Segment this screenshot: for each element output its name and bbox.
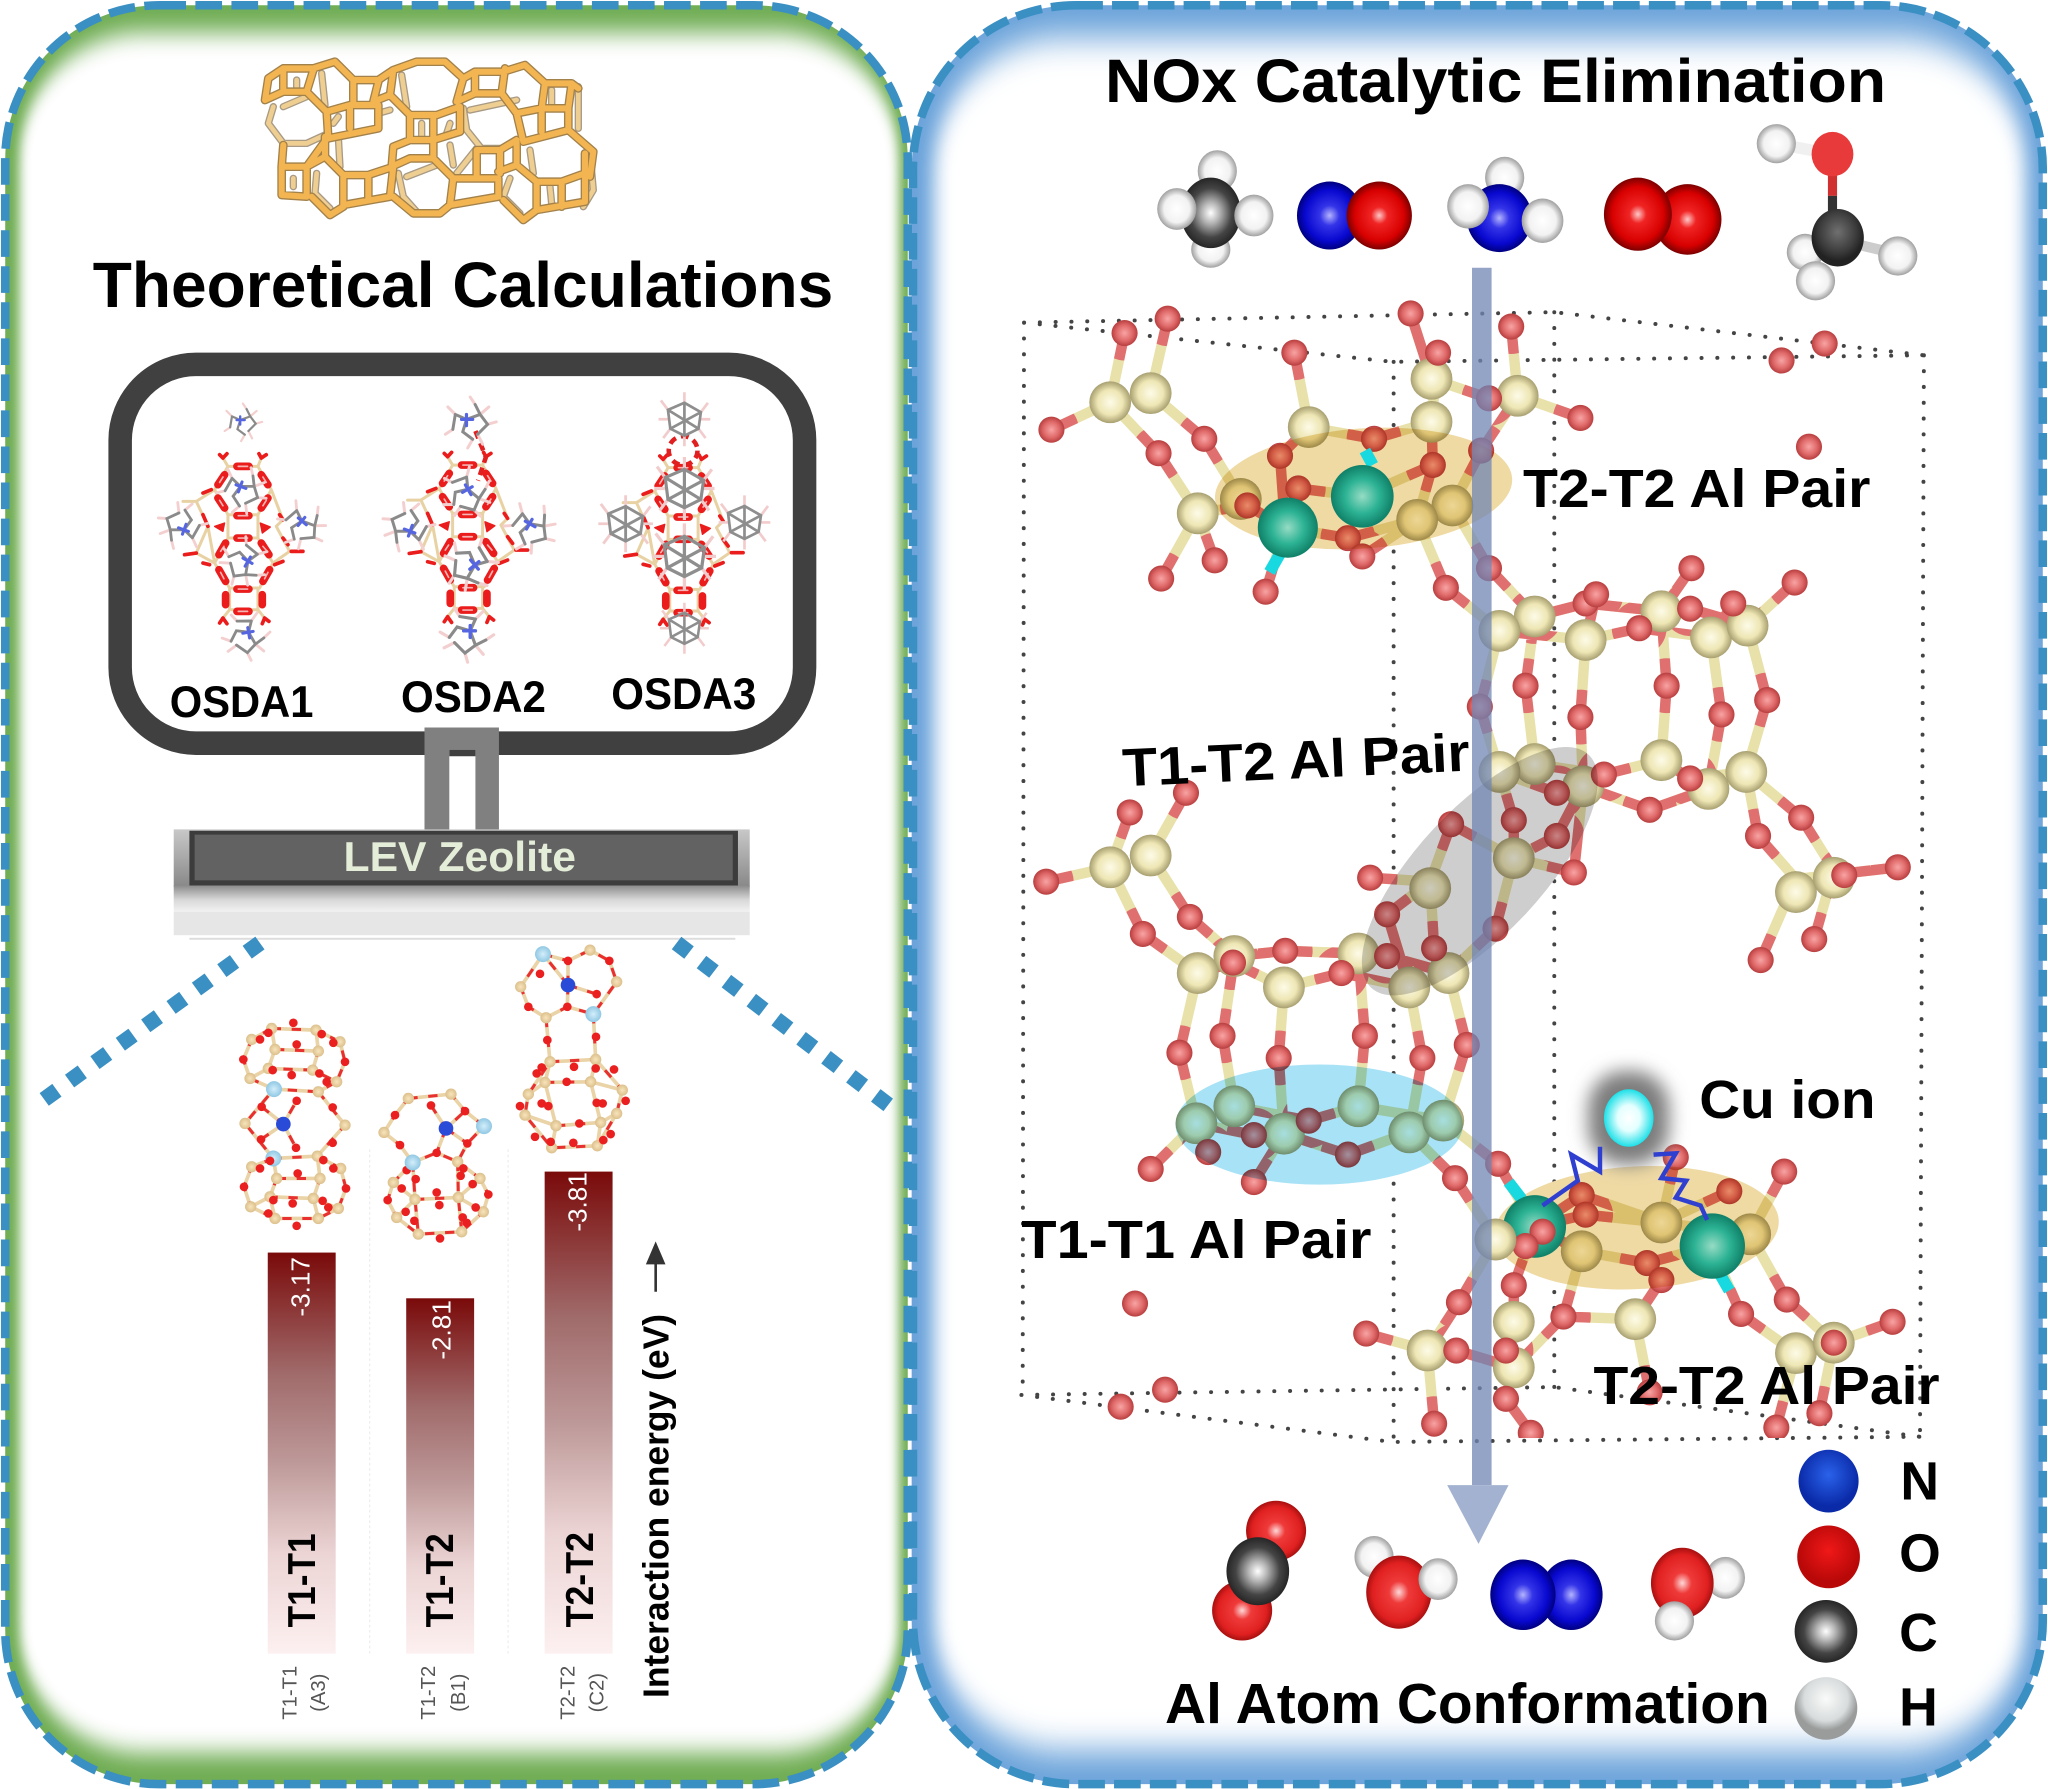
bar: T2-T2: T2-T2 <box>559 1532 602 1627</box>
bar chart: interaction energy <box>268 1172 677 1720</box>
monitor base: LEV Zeolite <box>174 829 750 940</box>
Cu ion with coordination bonds <box>1543 1071 1707 1220</box>
legend item: N: N <box>1900 1452 1939 1511</box>
heading: Theoretical Calculations: Theoretical Calculations <box>93 249 833 321</box>
OSDA2 structure <box>375 397 567 662</box>
label: T2-T2 Al Pair upper: T2-T2 Al Pair <box>1523 460 1871 519</box>
x labels: T2-T2 (C2): T2-T2 <box>558 1666 580 1720</box>
label: OSDA3: OSDA3 <box>611 670 756 719</box>
x labels: T1-T2 (B1): (B1) <box>448 1674 470 1712</box>
highlight: T1-T1 pair <box>1176 1064 1463 1185</box>
label: OSDA2: OSDA2 <box>401 673 546 722</box>
axis arrow <box>648 1245 664 1292</box>
molecule: H2O right <box>1651 1548 1745 1640</box>
legend item: C <box>1795 1600 1938 1663</box>
bar: T1-T2: -2.81 <box>427 1300 457 1360</box>
highlight: lower T2-T2 pair <box>1498 1166 1779 1290</box>
highlight: upper T2-T2 pair <box>1215 428 1512 550</box>
label: OSDA1: OSDA1 <box>170 678 313 727</box>
silicon atoms <box>1089 358 1855 1388</box>
label: Al Atom Conformation: Al Atom Conformation <box>1165 1672 1770 1735</box>
monitor stand <box>424 728 499 831</box>
panel: Theoretical Calculations <box>5 5 908 1784</box>
T2-T2 adsorption structure <box>515 944 630 1153</box>
legend item: H <box>1795 1677 1938 1740</box>
divider lines <box>370 1149 508 1654</box>
framework bonds <box>1046 313 1898 1433</box>
x labels: T1-T1 (A3): (A3) <box>308 1674 330 1712</box>
T1-T2 adsorption structure <box>378 1088 493 1243</box>
molecule: CH4 <box>1157 150 1273 268</box>
label: T1-T1 Al Pair: T1-T1 Al Pair <box>1021 1211 1372 1270</box>
zoom guide lines <box>37 943 899 1113</box>
x labels: T1-T1 (A3) <box>279 1666 330 1720</box>
bar: T1-T1: -3.17 <box>286 1257 316 1317</box>
molecule: CO2 <box>1212 1501 1306 1640</box>
legend item: C: C <box>1899 1604 1938 1663</box>
label: T2-T2 Al Pair lower: T2-T2 Al Pair <box>1593 1357 1940 1416</box>
legend item: O <box>1797 1524 1941 1588</box>
OSDA1 structure <box>150 404 337 665</box>
x labels: T2-T2 (C2) <box>558 1666 608 1720</box>
zeolite unit cell wireframe <box>1021 312 1924 1442</box>
bar: T1-T1: T1-T1 <box>281 1533 324 1627</box>
highlight: T1-T2 pair <box>1362 747 1598 996</box>
T1-T1 adsorption structure <box>239 1018 351 1230</box>
legend item: N <box>1799 1450 1939 1512</box>
molecule: CH3OH <box>1757 124 1917 300</box>
label: Cu ion: Cu ion <box>1699 1071 1876 1130</box>
bar: T1-T2 <box>406 1298 474 1654</box>
x labels: T1-T1 (A3): T1-T1 <box>279 1666 301 1720</box>
bar: T2-T2: -3.81 <box>562 1172 592 1232</box>
legend item: H: H <box>1899 1678 1938 1737</box>
legend item: O: O <box>1899 1524 1941 1583</box>
molecule: N2 <box>1490 1560 1603 1630</box>
x labels: T2-T2 (C2): (C2) <box>586 1673 608 1712</box>
process arrow <box>1447 268 1509 1544</box>
molecule: NO <box>1297 182 1412 249</box>
heading: NOx Catalytic Elimination: NOx Catalytic Elimination <box>1105 47 1886 116</box>
bar: T1-T1 <box>268 1253 336 1654</box>
molecule: O2 <box>1604 178 1721 255</box>
label: T1-T2 Al Pair: T1-T2 Al Pair <box>1121 724 1471 798</box>
zeolite framework atoms <box>1033 300 1911 1446</box>
panel: NOx Catalytic Elimination <box>912 5 2043 1784</box>
oxygen atoms <box>1033 300 1911 1446</box>
x labels: T1-T2 (B1) <box>418 1666 470 1720</box>
axis title: Interaction energy (eV) <box>636 1314 677 1698</box>
monitor with OSDA structures <box>120 364 805 743</box>
molecule: H2O left <box>1354 1536 1458 1629</box>
x labels: T1-T2 (B1): T1-T2 <box>418 1666 440 1720</box>
legend: elements <box>1795 1450 1941 1740</box>
bar: T2-T2 <box>545 1172 613 1654</box>
molecule: NH3 <box>1447 157 1563 252</box>
bar: T1-T2: T1-T2 <box>419 1533 462 1627</box>
aluminium atoms <box>1258 451 1745 1290</box>
OSDA3 structure <box>598 392 770 654</box>
icon: LEV zeolite cage <box>265 62 593 220</box>
monitor base: LEV Zeolite: LEV Zeolite <box>344 833 576 880</box>
